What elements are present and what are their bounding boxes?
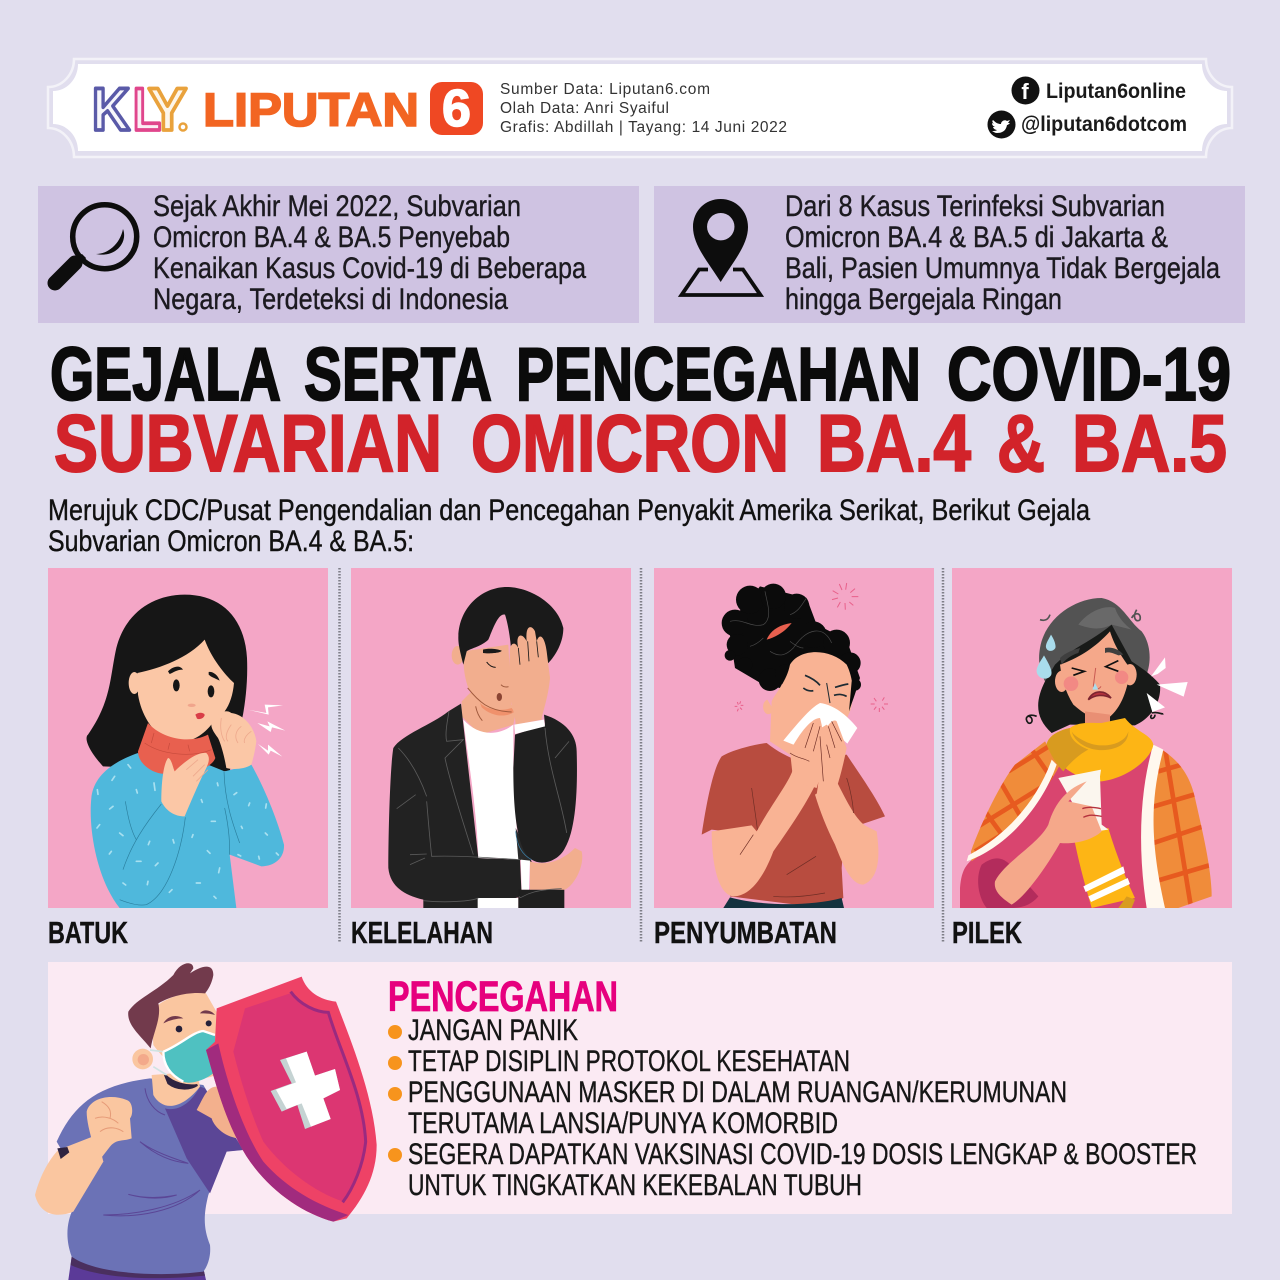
title: OMICRON: [471, 399, 789, 489]
social handles: f: [1021, 79, 1029, 104]
prevention list: UNTUK TINGKATKAN KEKEBALAN TUBUH: [408, 1169, 862, 1202]
label: batuk: BATUK: [48, 915, 128, 950]
source credits: Olah Data: Anri Syaiful: [500, 100, 669, 117]
prevention list: JANGAN PANIK: [408, 1014, 578, 1047]
prevention list: TETAP DISIPLIN PROTOKOL KESEHATAN: [408, 1045, 850, 1078]
KLY logo: [92, 76, 187, 143]
title: SUBVARIAN: [54, 399, 442, 489]
info text: detection: Kenaikan Kasus Covid-19 di Beberapa: [153, 252, 586, 285]
social handles: [988, 76, 1187, 138]
symptom card: batuk: [48, 568, 328, 950]
source credits: [500, 81, 787, 136]
illustration: masked man with shield: [35, 963, 377, 1280]
title: BA.4: [817, 399, 971, 489]
symptom card: penyumbatan: [654, 568, 934, 950]
info text: cases: [785, 190, 1220, 316]
icon: map pin: [682, 199, 760, 295]
KLY logo: L: [133, 76, 161, 143]
illustration: woman with runny nose: [960, 598, 1215, 911]
title: [50, 332, 1231, 489]
source credits: Grafis: Abdillah | Tayang: 14 Juni 2022: [500, 119, 787, 136]
prevention list: TERUTAMA LANSIA/PUNYA KOMORBID: [408, 1107, 838, 1140]
panel: pencegahan: [35, 962, 1232, 1280]
title: GEJALA: [50, 332, 281, 416]
info text: cases: Dari 8 Kasus Terinfeksi Subvarian: [785, 190, 1165, 223]
illustration: tired man: [388, 587, 582, 908]
info text: detection: [153, 190, 586, 316]
Liputan logo wordmark: LIPUTAN: [203, 83, 419, 136]
intro text: Merujuk CDC/Pusat Pengendalian dan Pencegahan Penyakit Amerika Serikat, Berikut Gejala: [48, 494, 1090, 527]
prevention list: [388, 1014, 1197, 1202]
icon: magnifier: [55, 205, 137, 283]
social handles: @liputan6dotcom: [1021, 113, 1187, 136]
info text: detection: Negara, Terdeteksi di Indonesia: [153, 283, 508, 316]
info panel: Jakarta and Bali cases: [654, 186, 1245, 323]
label: penyumbatan: PENYUMBATAN: [654, 915, 837, 950]
info text: cases: Omicron BA.4 & BA.5 di Jakarta &: [785, 221, 1168, 254]
KLY logo: K: [92, 76, 130, 143]
illustration: woman blowing nose: [702, 583, 888, 908]
info text: cases: hingga Bergejala Ringan: [785, 283, 1062, 316]
info text: detection: Sejak Akhir Mei 2022, Subvarian: [153, 190, 521, 223]
label: kelelahan: KELELAHAN: [351, 915, 493, 950]
intro text: Subvarian Omicron BA.4 & BA.5:: [48, 525, 414, 558]
illustration: coughing woman: [87, 595, 285, 908]
title: &: [997, 399, 1045, 489]
Liputan 6 badge: [430, 80, 483, 138]
title: PENCEGAHAN: [516, 332, 921, 416]
prevention heading: PENCEGAHAN: [388, 973, 618, 1021]
intro text: [48, 494, 1090, 558]
header banner: [48, 59, 1232, 157]
symptom card: kelelahan: [351, 568, 631, 950]
Liputan 6 badge: 6: [442, 80, 471, 138]
KLY logo: Y: [148, 76, 187, 143]
label: pilek: PILEK: [952, 915, 1022, 950]
social handles: Liputan6online: [1046, 80, 1186, 103]
title: SERTA: [304, 332, 492, 416]
info text: detection: Omicron BA.4 & BA.5 Penyebab: [153, 221, 510, 254]
source credits: Sumber Data: Liputan6.com: [500, 81, 710, 98]
symptom card: pilek: [952, 568, 1232, 950]
info panel: detection: [38, 186, 639, 323]
prevention list: PENGGUNAAN MASKER DI DALAM RUANGAN/KERUMUNAN: [408, 1076, 1067, 1109]
title: BA.5: [1072, 399, 1227, 489]
